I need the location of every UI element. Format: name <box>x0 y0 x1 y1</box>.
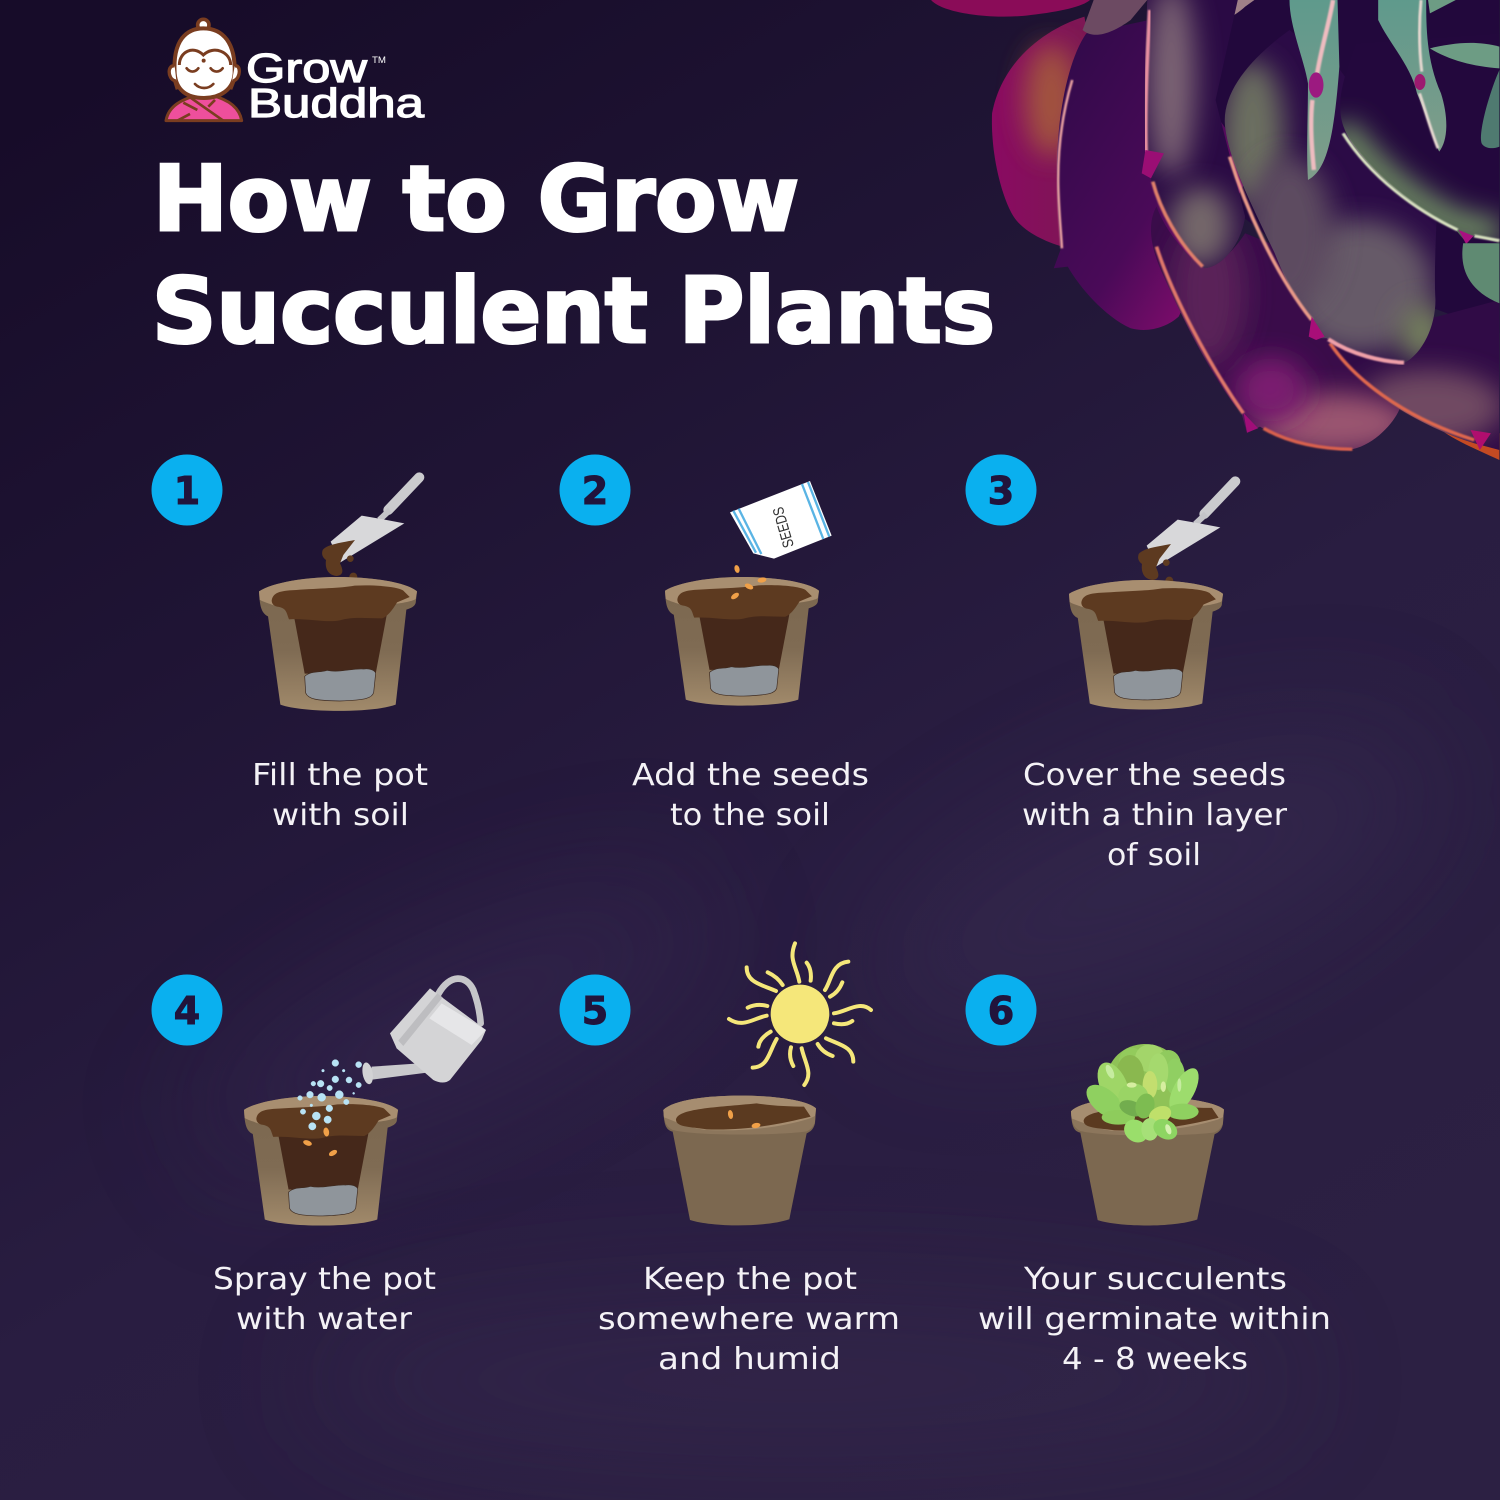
step 6 number badge: 6 <box>988 989 1014 1033</box>
step 4: spray with water <box>152 974 486 1337</box>
step 6 succulent <box>1080 1044 1205 1147</box>
step 3 number badge: 3 <box>988 469 1014 513</box>
step 4 pot <box>244 1096 398 1226</box>
step 1 number badge <box>152 454 222 526</box>
step 2 pot <box>665 577 819 706</box>
step 5: keep warm <box>560 943 900 1377</box>
step 5 seeds <box>727 1110 761 1129</box>
step 5 caption <box>598 1262 900 1377</box>
step 3 caption <box>1022 758 1288 873</box>
step 3 caption: of soil <box>1107 838 1201 873</box>
step 2 seed packet <box>730 481 832 559</box>
step 5 pot <box>663 1096 816 1225</box>
step 1 trowel with soil <box>322 477 419 581</box>
step 1 caption: Fill the pot <box>252 758 428 793</box>
step 5 caption: and humid <box>658 1342 841 1377</box>
step 5 sun <box>729 943 871 1085</box>
step 6 caption: will germinate within <box>978 1302 1331 1337</box>
step 1 pot <box>259 577 417 711</box>
step 3 caption: with a thin layer <box>1022 798 1288 833</box>
step 5 number badge <box>560 974 630 1046</box>
title: How to Grow <box>153 147 799 252</box>
step 3 pot <box>1069 580 1223 710</box>
step 6 caption: 4 - 8 weeks <box>1062 1342 1248 1377</box>
step 4 watering can <box>361 979 486 1085</box>
step 2 caption: Add the seeds <box>632 758 869 793</box>
step 3 caption: Cover the seeds <box>1023 758 1286 793</box>
step 4 water droplets <box>298 1060 362 1130</box>
step 5 caption: Keep the pot <box>643 1262 857 1297</box>
logo wordmark <box>246 45 424 126</box>
step 6 caption <box>978 1262 1331 1377</box>
succulent plant photo <box>931 0 1500 460</box>
step 2 number badge: 2 <box>582 469 608 513</box>
step 4 number badge: 4 <box>174 989 200 1033</box>
step 6: germinate <box>966 974 1331 1377</box>
step 2 seed packet: SEEDS <box>770 505 798 550</box>
step 2 caption <box>632 758 869 833</box>
title <box>152 147 995 364</box>
step 4 caption: with water <box>236 1302 413 1337</box>
step 1 caption: with soil <box>272 798 409 833</box>
step 3 number badge <box>966 454 1036 526</box>
step 1 caption <box>252 758 428 833</box>
logo: Grow Buddha <box>166 19 424 126</box>
step 2 number badge <box>560 454 630 526</box>
step 6 number badge <box>966 974 1036 1046</box>
step 4 caption <box>213 1262 436 1337</box>
step 5 number badge: 5 <box>582 989 608 1033</box>
logo wordmark: Buddha <box>248 80 424 126</box>
step 1 number badge: 1 <box>174 469 200 513</box>
step 4 seeds in soil <box>302 1127 338 1157</box>
step 3 trowel with soil <box>1138 481 1235 585</box>
step 3: cover the seeds <box>966 454 1288 873</box>
step 4 number badge <box>152 974 222 1046</box>
title: Succulent Plants <box>152 259 995 364</box>
step 4 caption: Spray the pot <box>213 1262 436 1297</box>
step 1: fill the pot <box>152 454 428 833</box>
step 2 falling seeds <box>730 564 767 601</box>
step 2: add the seeds <box>560 454 869 833</box>
icon: buddha <box>166 19 242 121</box>
step 6 pot <box>1071 1097 1224 1225</box>
step 6 caption: Your succulents <box>1023 1262 1287 1297</box>
step 2 caption: to the soil <box>670 798 830 833</box>
step 5 caption: somewhere warm <box>598 1302 900 1337</box>
logo wordmark: TM <box>372 55 386 65</box>
logo wordmark: Grow <box>246 45 367 91</box>
